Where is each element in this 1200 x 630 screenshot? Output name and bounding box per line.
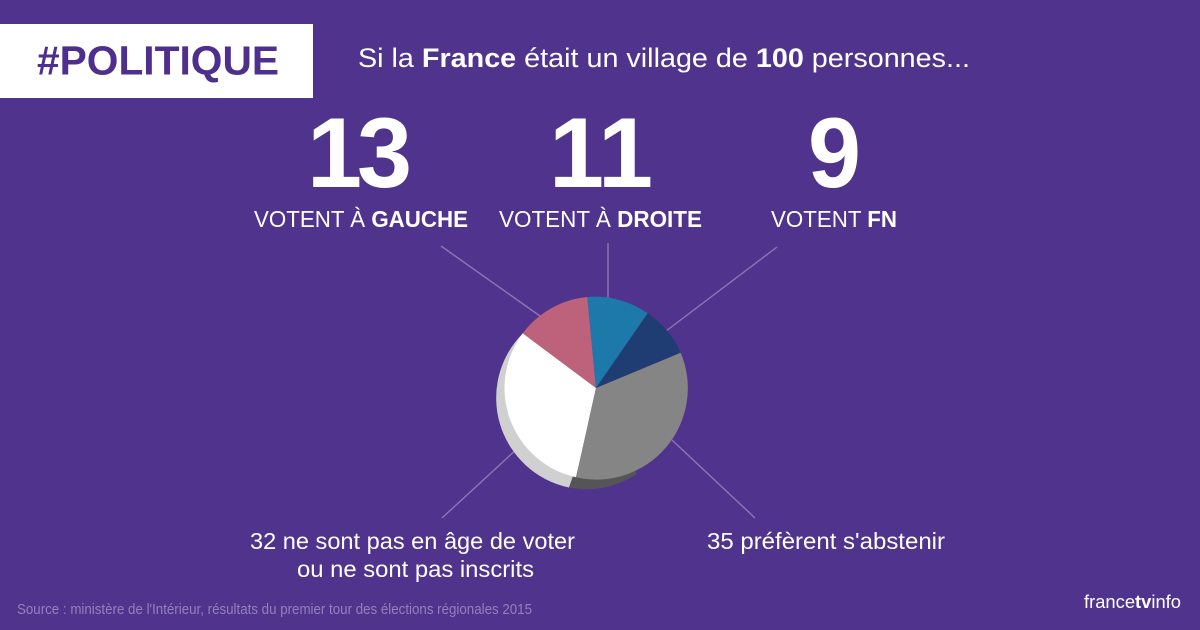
stat: 9 votent FN (771, 97, 897, 232)
slice: gauche (523, 297, 596, 388)
slice: abstention (576, 353, 688, 480)
label: 32 non-votants (250, 528, 575, 582)
pie chart (496, 297, 688, 489)
slice: FN (596, 313, 681, 388)
logo: francetvinfo: francetvinfo (1084, 591, 1181, 612)
stat: 9 votent FN: 9 (808, 97, 861, 208)
pie shadow: light (496, 334, 600, 488)
stat: 11 votent à droite: 11 (549, 97, 653, 208)
stat: 13 votent à gauche: VOTENT À GAUCHE (254, 206, 468, 232)
stat: 13 votent à gauche (254, 97, 468, 232)
tag: #POLITIQUE (0, 24, 313, 98)
slice: droite (587, 297, 648, 388)
heading: Si la France était un village de 100 personnes... (358, 43, 970, 73)
leader lines (441, 243, 777, 518)
source: Source : ministère de l'Intérieur, résultats du premier tour des élections régionales 2015 (17, 602, 532, 618)
label: 32 non-votants: 32 ne sont pas en âge de voter (250, 528, 575, 554)
tag: #POLITIQUE: #POLITIQUE (37, 38, 279, 84)
slice: hors vote (505, 333, 596, 477)
stat: 9 votent FN: VOTENT FN (771, 206, 897, 232)
stat: 13 votent à gauche: 13 (307, 97, 412, 208)
stat: 11 votent à droite (499, 97, 702, 232)
pie shadow: dark (569, 440, 637, 489)
label: 35 abstention: 35 préfèrent s'abstenir (707, 528, 945, 554)
stat: 11 votent à droite: VOTENT À DROITE (499, 206, 702, 232)
label: 32 non-votants: ou ne sont pas inscrits (297, 556, 534, 582)
